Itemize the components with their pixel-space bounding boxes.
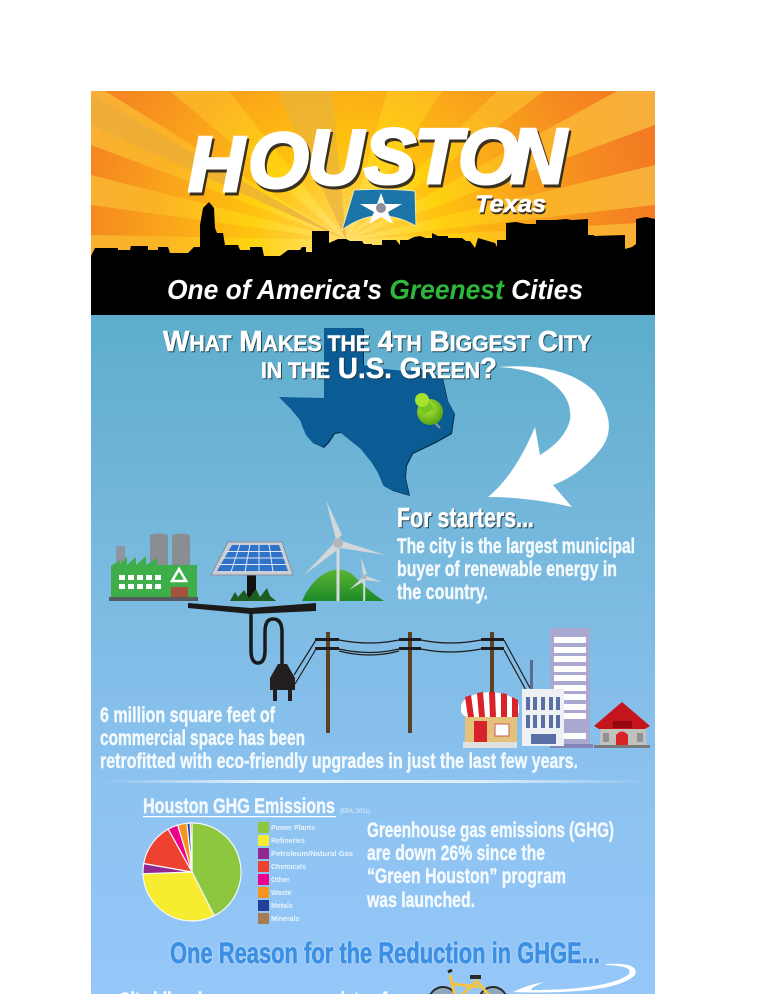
- icon: power cable and plug: [188, 603, 316, 701]
- heading: what makes the city green: WHAT MAKES THE 4TH BIGGEST CITY: [163, 326, 591, 358]
- legend: emission sources: Power Plants: [271, 825, 315, 832]
- text block: for starters: The city is the largest municipal: [397, 535, 635, 558]
- text block: for starters: buyer of renewable energy in: [397, 558, 617, 581]
- icon: office building: [522, 660, 564, 746]
- tagline: One of America's Greenest Cities: [167, 274, 583, 305]
- text block: commercial space retrofitted: retrofitted with eco-friendly upgrades in just the last few years.: [100, 750, 578, 773]
- icon: green factory: [109, 534, 198, 601]
- icon: wind turbines on hill: [302, 500, 385, 601]
- text block: commercial space retrofitted: 6 million square feet of: [100, 704, 276, 727]
- heading: Houston GHG Emissions: Houston GHG Emissions: [143, 795, 335, 818]
- text block: commercial space retrofitted: [100, 704, 578, 773]
- text block: greenhouse gas emissions down: was launched.: [366, 889, 475, 912]
- panel: blue body background: [91, 315, 655, 994]
- text block: greenhouse gas emissions down: [366, 819, 614, 912]
- heading: what makes the city green: IN THE U.S. GREEN?: [261, 353, 497, 385]
- heading: Houston GHG Emissions: (EPA, 2011): [340, 809, 370, 815]
- icon: Houston flag: [342, 189, 416, 230]
- text block: greenhouse gas emissions down: “Green Houston” program: [367, 865, 566, 888]
- arrow: white swoosh to bicycle: [513, 964, 636, 992]
- pie chart: GHG emissions: [143, 823, 241, 921]
- legend: emission sources: Chemicals: [271, 864, 306, 871]
- icon: green pushpin: [415, 393, 443, 428]
- text block: for starters: the country.: [397, 581, 488, 604]
- icon: utility poles and wires: [294, 632, 530, 733]
- text block: for starters: For starters...: [397, 502, 534, 533]
- skyline: [91, 202, 655, 315]
- arrow: curved white arrow: [488, 366, 609, 507]
- text block: greenhouse gas emissions down: Greenhouse gas emissions (GHG): [367, 819, 614, 842]
- text block: greenhouse gas emissions down: are down 26% since the: [367, 842, 545, 865]
- text block: for starters: [397, 502, 635, 604]
- map: Texas: [279, 328, 454, 495]
- heading: what makes the city green: [163, 326, 591, 385]
- text block: commercial space retrofitted: commercial space has been: [100, 727, 305, 750]
- icon: solar panel: [211, 542, 293, 601]
- panel: header sunburst: [91, 91, 655, 315]
- subtitle: Texas: Texas: [475, 191, 546, 218]
- legend: emission sources: Waste: [271, 890, 291, 897]
- legend: emission sources: Minerals: [271, 916, 300, 923]
- icon: yellow bicycle: [429, 970, 507, 994]
- legend: emission sources: Petroleum/Natural Gas: [271, 851, 353, 858]
- legend: emission sources: Metals: [271, 903, 293, 910]
- icon: shop with striped awning: [461, 692, 519, 748]
- icon: skyscraper: [550, 628, 593, 748]
- legend: emission sources: Other: [271, 877, 290, 884]
- icon: red-roofed house: [594, 702, 650, 748]
- title: HOUSTON: HOUSTON: [188, 112, 568, 208]
- heading: one reason for the reduction: One Reason for the Reduction in GHGE...: [170, 937, 600, 970]
- legend: emission sources: Refineries: [271, 838, 305, 845]
- legend: emission sources: [258, 822, 353, 924]
